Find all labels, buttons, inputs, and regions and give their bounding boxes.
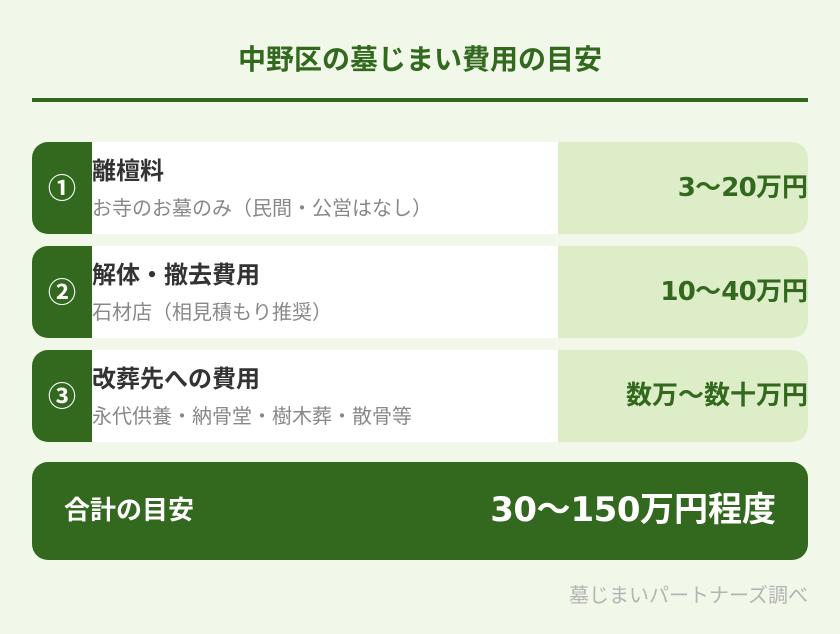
panel: item 2	[32, 246, 808, 338]
item 2 cost: 10〜40万円	[660, 277, 808, 307]
item 3 description: 永代供養・納骨堂・樹木葬・散骨等	[92, 404, 412, 428]
title: 中野区の墓じまい費用の目安	[238, 43, 602, 76]
item 1 description: お寺のお墓のみ（民間・公営はなし）	[92, 196, 432, 220]
source note: 墓じまいパートナーズ調べ	[569, 583, 808, 607]
number badge 3	[32, 350, 92, 442]
item 2 description: 石材店（相見積もり推奨）	[92, 300, 332, 324]
title rule	[32, 98, 808, 102]
item 1 cost: 3〜20万円	[678, 173, 808, 203]
item 2 name: 解体・撤去費用	[92, 261, 260, 289]
panel: item 3	[32, 350, 808, 442]
panel: item 1	[32, 142, 808, 234]
item 3 cost	[558, 350, 808, 442]
number badge 3: ③	[48, 375, 76, 415]
number badge 2	[32, 246, 92, 338]
number badge 1: ①	[48, 167, 76, 207]
item 2 cost	[558, 246, 808, 338]
number badge 1	[32, 142, 92, 234]
number badge 2: ②	[48, 271, 76, 311]
total label: 合計の目安	[64, 496, 194, 526]
total amount: 30〜150万円程度	[490, 490, 776, 530]
item 3 name: 改葬先への費用	[92, 365, 260, 393]
panel: total	[32, 462, 808, 560]
item 1 cost	[558, 142, 808, 234]
item 1 name: 離檀料	[92, 157, 164, 185]
item 3 cost: 数万〜数十万円	[626, 381, 808, 411]
